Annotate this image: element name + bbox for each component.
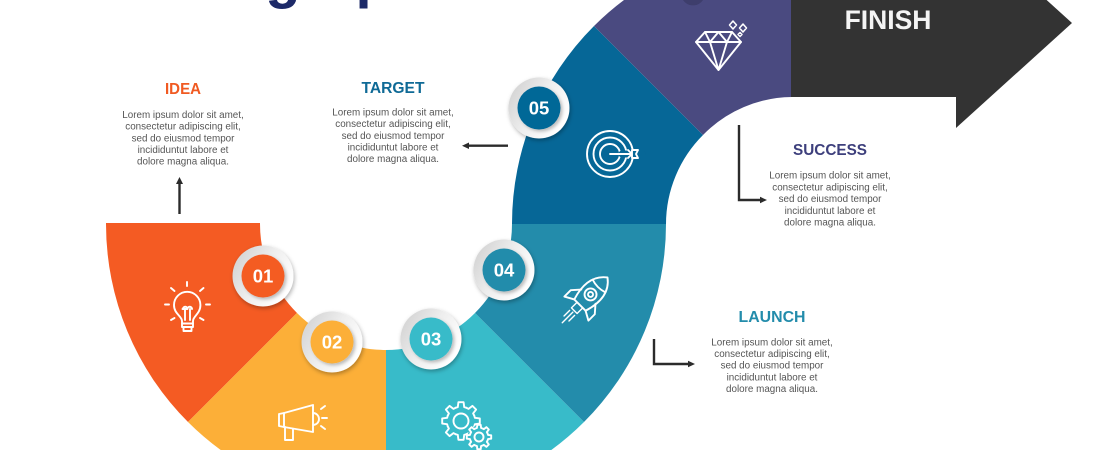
text block: idea: IDEA	[165, 81, 201, 98]
text block: target: sed do eiusmod tempor	[342, 131, 445, 142]
icon: target	[587, 131, 642, 177]
badge 01: 01	[253, 266, 273, 286]
text block: launch: dolore magna aliqua.	[726, 384, 818, 395]
segment 06 purple	[594, 0, 792, 135]
text block: idea: dolore magna aliqua.	[137, 157, 229, 168]
icon: gears	[442, 402, 491, 449]
badge 03	[400, 308, 462, 370]
badge 05: 05	[529, 98, 549, 118]
badge 06 shadow (cropped)	[683, 0, 703, 5]
icon: light bulb	[165, 282, 210, 331]
text block: idea	[122, 81, 244, 168]
text block: success: dolore magna aliqua.	[784, 218, 876, 229]
text block: success: incididuntut labore et	[785, 206, 876, 217]
text block: success: Lorem ipsum dolor sit amet,	[769, 171, 891, 182]
icon: diamond	[696, 21, 746, 70]
text block: launch: sed do eiusmod tempor	[721, 361, 824, 372]
segment 05 deep blue	[512, 26, 703, 224]
text block: idea: sed do eiusmod tempor	[132, 133, 235, 144]
text block: success	[769, 142, 891, 229]
segment 02 yellow	[188, 313, 386, 450]
text block: target: TARGET	[362, 80, 425, 97]
badge 01	[232, 246, 294, 306]
arrow: to launch	[654, 339, 695, 367]
arrow: to target	[462, 142, 508, 149]
badge 02: 02	[322, 332, 342, 352]
text block: launch: LAUNCH	[738, 309, 806, 326]
segment 01 orange	[106, 223, 297, 422]
text block: target	[332, 80, 454, 165]
arrow: to idea	[176, 177, 183, 214]
text block: target: incididuntut labore et	[348, 142, 439, 154]
text block: success: SUCCESS	[793, 142, 867, 159]
finish arrow	[791, 0, 1072, 128]
icon: rocket	[550, 265, 620, 335]
badge 02	[302, 312, 362, 372]
text block: idea: consectetur adipiscing elit,	[125, 122, 241, 133]
text block: launch	[711, 309, 833, 395]
badge 03: 03	[421, 328, 441, 350]
text block: launch: incididuntut labore et	[727, 372, 818, 383]
text block: idea: incididuntut labore et	[138, 145, 229, 156]
text block: success: sed do eiusmod tempor	[779, 194, 882, 205]
badge 05	[508, 78, 570, 138]
text block: target: dolore magna aliqua.	[347, 154, 439, 165]
badge 04: 04	[494, 260, 515, 280]
segment 04 blue-teal	[475, 224, 666, 422]
text block: launch: Lorem ipsum dolor sit amet,	[711, 337, 833, 348]
badge 04	[474, 240, 534, 300]
text block: success: consectetur adipiscing elit,	[772, 182, 888, 193]
arrow: to success	[739, 125, 767, 203]
text block: target: consectetur adipiscing elit,	[335, 119, 451, 130]
text block: launch: consectetur adipiscing elit,	[714, 349, 830, 360]
text block: idea: Lorem ipsum dolor sit amet,	[122, 110, 244, 121]
segment 03 teal	[386, 313, 584, 450]
finish label: FINISH	[845, 5, 931, 35]
icon: megaphone	[279, 405, 327, 440]
text block: target: Lorem ipsum dolor sit amet,	[332, 108, 454, 118]
